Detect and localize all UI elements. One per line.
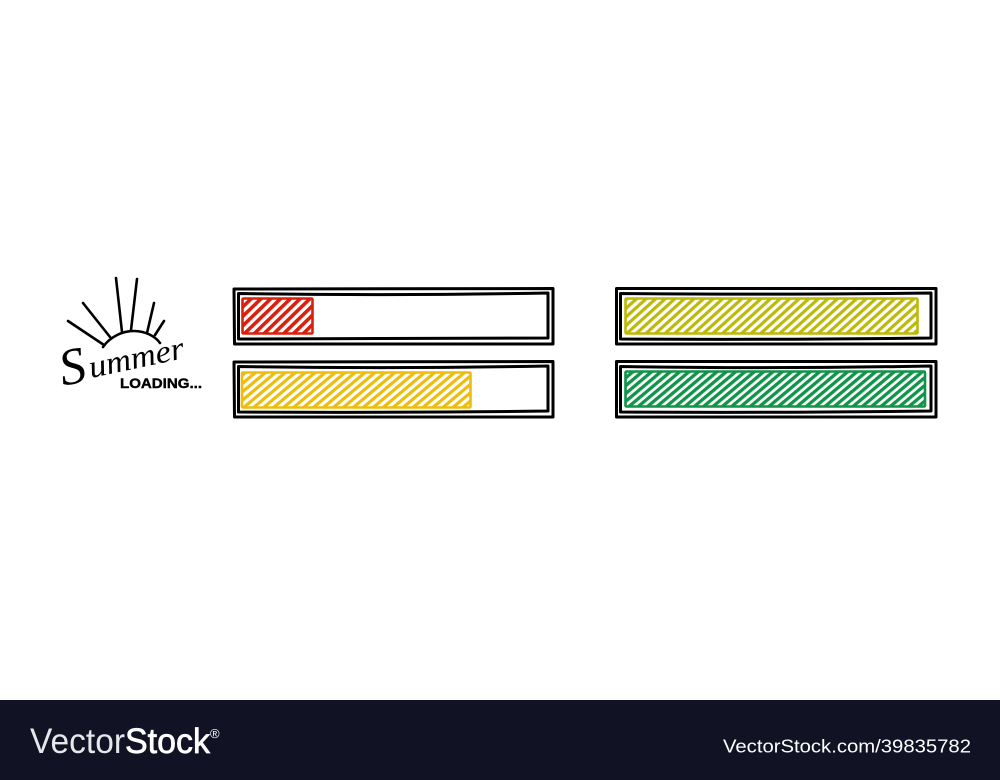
script word: Summer: S: [54, 337, 91, 398]
green hatched fill: [626, 372, 925, 406]
brand logo: VectorStock: [30, 722, 210, 761]
icon: sun with rays: [68, 278, 164, 347]
progress bar: yellow, medium: [234, 362, 553, 417]
yellow hatched fill: [242, 372, 470, 408]
script word: Summer: ummer: [85, 329, 188, 385]
brand logo: VectorStock: Vector: [30, 722, 125, 761]
caption: loading: LOADING...: [120, 376, 202, 391]
progress bar: olive, high: [616, 288, 936, 344]
red hatched fill: [242, 298, 312, 334]
bar frame: [616, 362, 936, 417]
logo: summer loading: [54, 278, 202, 398]
bar frame: [616, 288, 936, 344]
footer band: [0, 700, 1000, 780]
image reference: VectorStock.com/39835782: [723, 736, 971, 756]
progress bar: red, low: [234, 288, 553, 344]
brand logo: VectorStock: Stock: [125, 722, 210, 761]
bar frame: [234, 288, 553, 344]
progress bar: green, full: [616, 362, 936, 417]
olive hatched fill: [626, 298, 918, 334]
bar frame: [234, 362, 553, 417]
registered mark: ®: [210, 726, 220, 741]
